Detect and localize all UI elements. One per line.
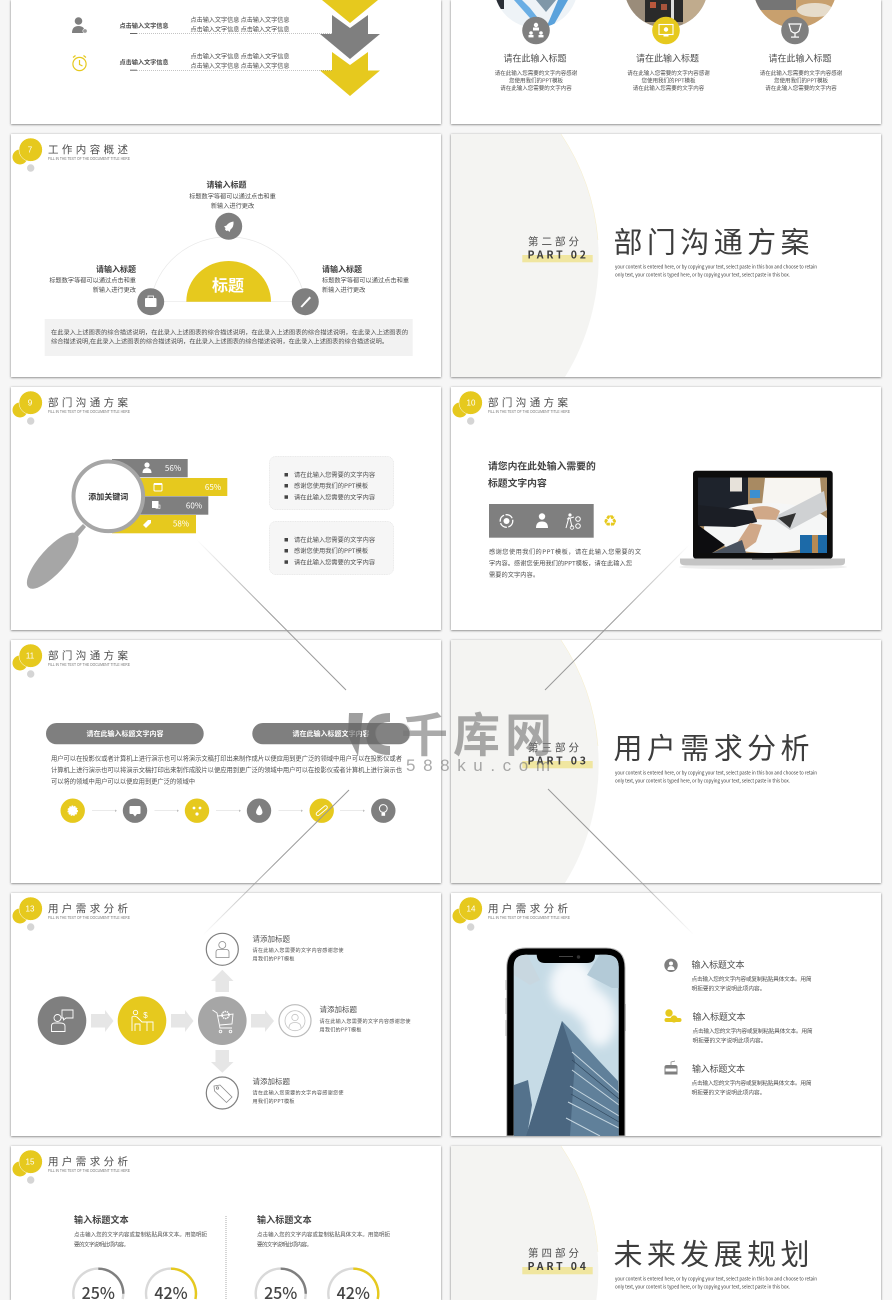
panel: slide 14 phone bbox=[451, 893, 881, 1136]
panel: slide 13 flow bbox=[11, 893, 441, 1136]
header: slide 11: 部门沟通方案 bbox=[48, 648, 128, 663]
column 2 text bbox=[627, 52, 710, 92]
pill 2 bbox=[252, 723, 410, 744]
heading: 请您内在此处输入需要的 bbox=[488, 458, 596, 472]
icon: network badge bbox=[522, 17, 550, 44]
column 3 text: 请在此输入您需要的文字内容感谢 bbox=[760, 69, 843, 77]
text: top bbox=[189, 180, 276, 210]
text: top: 请在此输入您需要的文字内容感谢您使 bbox=[252, 947, 344, 954]
header: slide 14 bbox=[452, 897, 570, 931]
item 3 text: 点击输入您的文字内容或复制粘贴具体文本。用简 bbox=[692, 1078, 812, 1087]
column 1 text bbox=[495, 52, 578, 92]
panel: slide 6 right with three photos bbox=[451, 0, 881, 124]
section accent bbox=[561, 134, 598, 240]
section note bbox=[615, 1276, 817, 1290]
node: cart bbox=[198, 996, 247, 1045]
column 2 text: 请在此输入标题 bbox=[636, 52, 699, 64]
header: slide 7: 工作内容概述 bbox=[48, 142, 128, 157]
column 2 text: 点击输入您的文字内容或复制粘贴具体文本。用简明扼 bbox=[257, 1230, 390, 1238]
item 1 text: 输入标题文本 bbox=[692, 958, 744, 971]
section circle bbox=[451, 1146, 598, 1300]
magnifier bbox=[19, 462, 143, 596]
header: slide 14: 14 bbox=[467, 904, 476, 914]
ring 42 left bbox=[146, 1269, 196, 1300]
header: slide 11: 11 bbox=[26, 652, 35, 660]
text: top: 新输入进行更改 bbox=[211, 201, 254, 210]
section title: 用户需求分析 bbox=[614, 726, 810, 768]
panel: slide 16 section four bbox=[451, 1146, 881, 1300]
text: left: 标题数字等都可以通过点击和重 bbox=[49, 276, 136, 284]
item 1 text: 点击输入您的文字内容或复制粘贴具体文本。用简 bbox=[692, 974, 812, 983]
section note: only text, your content is typed here, or by copying your text, select paste in this box. bbox=[615, 272, 791, 278]
paragraph bbox=[51, 754, 402, 786]
bars: 56% bbox=[165, 463, 182, 474]
process icons bbox=[60, 798, 395, 823]
icon: user bbox=[664, 959, 678, 972]
description box: 在此录入上述图表的综合描述说明，在此录入上述图表的综合描述说明，在此录入上述图表的综合描述说明，在此录入上述图表的 bbox=[51, 328, 408, 336]
panel: slide 11 communication bbox=[11, 640, 441, 883]
item 1 text bbox=[692, 958, 812, 992]
header: slide 9: FILL IN THE TEXT OF THE DOCUMENT TITLE HERE bbox=[48, 409, 130, 414]
column 2 text: 请在此输入您需要的文字内容感谢 bbox=[627, 69, 710, 77]
header: slide 11 bbox=[12, 644, 130, 678]
panel: slide 6 list with arrows bbox=[11, 0, 441, 124]
node: target outline bbox=[279, 1005, 311, 1037]
column 2 text: 请在此输入您需要的文字内容 bbox=[633, 84, 705, 92]
row 2 text: 点击输入文字信息 点击输入文字信息 bbox=[190, 52, 290, 60]
text: right: 请输入标题 bbox=[322, 264, 362, 275]
header: slide 9 bbox=[12, 391, 130, 425]
header: slide 13: 用户需求分析 bbox=[48, 901, 128, 916]
item 2 text: 点击输入您的文字内容或复制粘贴具体文本。用简 bbox=[692, 1026, 813, 1035]
node: desk: $ bbox=[143, 1011, 148, 1020]
column 1 text: 要的文字说明此项内容。 bbox=[74, 1240, 129, 1248]
semicircle diagram: 标题 bbox=[212, 272, 244, 296]
node: user outline bbox=[206, 933, 238, 965]
column 2 text: 您使用我们的PPT模板 bbox=[641, 77, 696, 85]
paragraph: 可以将的领域中用户可以以便应用到更广泛的领域中 bbox=[51, 776, 195, 786]
header: slide 13: 13 bbox=[26, 904, 35, 914]
section label bbox=[522, 234, 593, 262]
magnifier: 添加关键词 bbox=[88, 492, 128, 502]
phone bbox=[506, 948, 626, 1136]
section note: your content is entered here, or by copying your text, select paste in this box and choose to retain bbox=[615, 264, 817, 270]
header: slide 9: 部门沟通方案 bbox=[48, 395, 128, 410]
list box 1: 请在此输入您需要的文字内容 bbox=[294, 492, 375, 501]
column 2 text: 要的文字说明此项内容。 bbox=[257, 1240, 312, 1248]
description box: 综合描述说明,在此录入上述图表的综合描述说明，在此录入上述图表的综合描述说明，在此录入上述图表的综合描述说明。 bbox=[51, 336, 388, 346]
body text: 字内容。感谢您使用我们的PPT模板，请在此输入您 bbox=[489, 558, 632, 568]
icon: alarm clock bbox=[73, 56, 86, 71]
text: bottom: 请在此输入您需要的文字内容感谢您使 bbox=[252, 1090, 344, 1096]
item 1 text: 明扼要的文字说明此项内容。 bbox=[692, 984, 765, 992]
bars: 58% bbox=[173, 518, 190, 530]
body text bbox=[489, 547, 641, 579]
body text: 感谢您使用我们的PPT模板，请在此输入您需要的文 bbox=[489, 547, 641, 556]
text: bottom: 请添加标题 bbox=[252, 1076, 290, 1087]
ring 25 right bbox=[256, 1269, 306, 1300]
column 2 text bbox=[257, 1213, 390, 1248]
text: right bbox=[322, 264, 409, 294]
panel: slide 8 section two bbox=[451, 134, 881, 377]
list box 2: 请在此输入您需要的文字内容 bbox=[294, 535, 375, 544]
text: top: 请输入标题 bbox=[206, 180, 246, 190]
pill 1 bbox=[46, 723, 204, 744]
header: slide 15 bbox=[12, 1150, 130, 1184]
row 1 text bbox=[120, 15, 332, 34]
body text: 需要的文字内容。 bbox=[489, 570, 539, 579]
node: chat bbox=[38, 996, 86, 1045]
node: tag outline bbox=[206, 1077, 238, 1109]
list box 1 bbox=[269, 456, 394, 510]
header: slide 10 bbox=[452, 391, 570, 425]
text: left: 新输入进行更改 bbox=[93, 285, 136, 294]
item 3 text: 明扼要的文字说明此项内容。 bbox=[692, 1088, 765, 1096]
row 2 text: 点击输入文字信息 点击输入文字信息 bbox=[190, 61, 290, 70]
item 2 text bbox=[692, 1010, 813, 1044]
header: slide 13: FILL IN THE TEXT OF THE DOCUMENT TITLE HERE bbox=[48, 915, 130, 920]
section note bbox=[615, 770, 817, 784]
header: slide 10: 10 bbox=[467, 398, 476, 408]
section circle bbox=[451, 640, 599, 883]
node: desk bbox=[118, 996, 166, 1045]
semicircle diagram bbox=[151, 237, 305, 302]
row 1 text: 点击输入文字信息 点击输入文字信息 bbox=[190, 15, 290, 24]
row 1 text: 点击输入文字信息 点击输入文字信息 bbox=[190, 24, 290, 33]
section accent bbox=[561, 1146, 598, 1252]
icon: clouds bbox=[664, 1009, 682, 1023]
icon: recycle: ♻ bbox=[603, 512, 617, 530]
column 3 text bbox=[760, 52, 843, 92]
text: left: 请输入标题 bbox=[96, 264, 136, 275]
column 3 text: 请在此输入标题 bbox=[768, 52, 832, 64]
item 3 text bbox=[692, 1062, 812, 1096]
ring 42 right bbox=[328, 1269, 378, 1300]
item 2 text: 明扼要的文字说明此项内容。 bbox=[692, 1036, 766, 1044]
icon: monitor badge bbox=[652, 17, 680, 44]
section accent bbox=[561, 640, 598, 746]
section label bbox=[522, 740, 593, 768]
bars bbox=[112, 459, 227, 533]
text: bottom bbox=[252, 1076, 344, 1105]
text: right: 新输入进行更改 bbox=[322, 285, 365, 294]
column 1 text: 点击输入您的文字内容或复制粘贴具体文本。用简明扼 bbox=[74, 1230, 207, 1238]
bars: 60% bbox=[186, 500, 203, 512]
column 1 text: 请在此输入您需要的文字内容 bbox=[500, 84, 572, 92]
header: slide 9: 9 bbox=[28, 398, 33, 408]
row 2 text bbox=[120, 52, 332, 71]
icon: rocket bbox=[215, 213, 242, 240]
section label: PART 04 bbox=[528, 1259, 586, 1274]
section label: PART 03 bbox=[528, 754, 586, 768]
section label: PART 02 bbox=[528, 248, 586, 262]
row 1 text: 点击输入文字信息 bbox=[120, 21, 168, 30]
watermark: logo and site name: 588ku.com bbox=[406, 756, 550, 775]
watermark: diagonal lines bbox=[197, 540, 694, 935]
text: right: 请添加标题 bbox=[320, 1004, 357, 1015]
column 1 text bbox=[74, 1213, 207, 1248]
text: top bbox=[252, 934, 344, 962]
pill 2: 请在此输入标题文字内容 bbox=[292, 729, 370, 739]
icon: pencil bbox=[292, 288, 319, 315]
section note: only text, your content is typed here, or by copying your text, select paste in this box. bbox=[615, 1284, 791, 1290]
laptop bbox=[679, 471, 847, 570]
icon: briefcase bbox=[137, 288, 164, 315]
header: slide 14: 用户需求分析 bbox=[488, 901, 568, 916]
section label bbox=[522, 1246, 593, 1274]
section note bbox=[615, 264, 817, 278]
icon: keyboard bbox=[664, 1061, 678, 1074]
icon band bbox=[489, 504, 594, 538]
column 1 text: 输入标题文本 bbox=[74, 1213, 129, 1226]
header: slide 10: FILL IN THE TEXT OF THE DOCUMENT TITLE HERE bbox=[488, 409, 570, 414]
text: right: 用我们的PPT模板 bbox=[320, 1026, 362, 1034]
header: slide 15: 用户需求分析 bbox=[48, 1154, 128, 1169]
list box 2: 请在此输入您需要的文字内容 bbox=[294, 557, 375, 566]
paragraph: 计算机上进行演示也可以将演示文稿打印出来制作成胶片以便应用到更广泛的领域中用户可以在投影仪或者计算机上进行演示也 bbox=[51, 765, 402, 774]
section note: your content is entered here, or by copying your text, select paste in this box and choose to retain bbox=[615, 1276, 817, 1282]
icon: trophy badge bbox=[781, 17, 809, 44]
flow arrows bbox=[91, 970, 274, 1073]
column 2 text: 输入标题文本 bbox=[257, 1213, 312, 1226]
header: slide 15: 15 bbox=[26, 1158, 35, 1166]
list box 2 bbox=[269, 521, 394, 575]
text: top: 请添加标题 bbox=[252, 934, 290, 944]
bars: 65% bbox=[205, 482, 222, 493]
header: slide 10: 部门沟通方案 bbox=[488, 395, 568, 410]
panel: slide 7 work overview bbox=[11, 134, 441, 377]
watermark: logo and site name bbox=[348, 697, 552, 775]
heading bbox=[488, 458, 596, 490]
column 1 text: 您使用我们的PPT模板 bbox=[509, 77, 564, 85]
header: slide 7: 7 bbox=[28, 146, 33, 154]
icon: person bbox=[72, 17, 87, 33]
section circle bbox=[451, 134, 599, 377]
list box 2: 感谢您使用我们的PPT模板 bbox=[294, 546, 368, 555]
text: top: 标题数字等都可以通过点击和重 bbox=[189, 192, 276, 200]
section note: your content is entered here, or by copying your text, select paste in this box and choose to retain bbox=[615, 770, 817, 776]
photo 3 bbox=[755, 0, 834, 26]
item 3 text: 输入标题文本 bbox=[692, 1062, 745, 1075]
list box 1: 感谢您使用我们的PPT模板 bbox=[294, 481, 368, 490]
list box 1: 请在此输入您需要的文字内容 bbox=[294, 470, 375, 479]
header: slide 7 bbox=[12, 138, 130, 172]
text: top: 用我们的PPT模板 bbox=[252, 956, 294, 962]
text: right: 标题数字等都可以通过点击和重 bbox=[322, 276, 409, 284]
text: right bbox=[320, 1004, 410, 1034]
arrow: bottom yellow bbox=[320, 52, 380, 96]
header: slide 15: FILL IN THE TEXT OF THE DOCUMENT TITLE HERE bbox=[48, 1168, 130, 1173]
header: slide 14: FILL IN THE TEXT OF THE DOCUMENT TITLE HERE bbox=[488, 915, 570, 920]
section note: only text, your content is typed here, or by copying your text, select paste in this box. bbox=[615, 778, 791, 784]
item 2 text: 输入标题文本 bbox=[692, 1010, 746, 1023]
panel: slide 12 section three bbox=[451, 640, 881, 883]
panel: slide 10 laptop bbox=[451, 387, 881, 630]
photo 2 bbox=[626, 0, 706, 26]
arrow: middle gray bbox=[320, 15, 380, 59]
divider bbox=[225, 1216, 227, 1299]
row 2 text: 点击输入文字信息 bbox=[120, 57, 168, 66]
column 3 text: 请在此输入您需要的文字内容 bbox=[765, 84, 837, 92]
panel: slide 9 magnifier bbox=[11, 387, 441, 630]
arrow: top yellow bbox=[322, 0, 378, 23]
section title: 未来发展规划 bbox=[614, 1232, 810, 1274]
header: slide 13 bbox=[12, 897, 130, 931]
text: left bbox=[49, 264, 136, 294]
column 1 text: 请在此输入您需要的文字内容感谢 bbox=[495, 69, 578, 77]
section title: 部门沟通方案 bbox=[614, 220, 810, 262]
heading: 标题文字内容 bbox=[488, 476, 547, 490]
section label: 第三部分 bbox=[528, 740, 582, 755]
pill 1: 请在此输入标题文字内容 bbox=[86, 729, 164, 739]
header: slide 7: FILL IN THE TEXT OF THE DOCUMENT TITLE HERE bbox=[48, 156, 130, 161]
text: right: 请在此输入您需要的文字内容感谢您使 bbox=[320, 1018, 410, 1025]
column 1 text: 请在此输入标题 bbox=[503, 52, 567, 64]
watermark: logo and site name: 千库网 bbox=[401, 697, 552, 766]
panel: slide 15 rings bbox=[11, 1146, 441, 1300]
text: bottom: 用我们的PPT模板 bbox=[252, 1098, 294, 1105]
column 3 text: 您使用我们的PPT模板 bbox=[774, 77, 829, 85]
ring 25 left bbox=[73, 1269, 123, 1300]
paragraph: 用户可以在投影仪或者计算机上进行演示也可以将演示文稿打印出来制作成片以便应用到更广泛的领域中用户可以在投影仪或者 bbox=[51, 754, 402, 762]
header: slide 11: FILL IN THE TEXT OF THE DOCUMENT TITLE HERE bbox=[48, 662, 130, 667]
section label: 第二部分 bbox=[528, 234, 582, 249]
photo 1 bbox=[496, 0, 576, 26]
section label: 第四部分 bbox=[528, 1246, 582, 1260]
description box bbox=[45, 319, 413, 356]
